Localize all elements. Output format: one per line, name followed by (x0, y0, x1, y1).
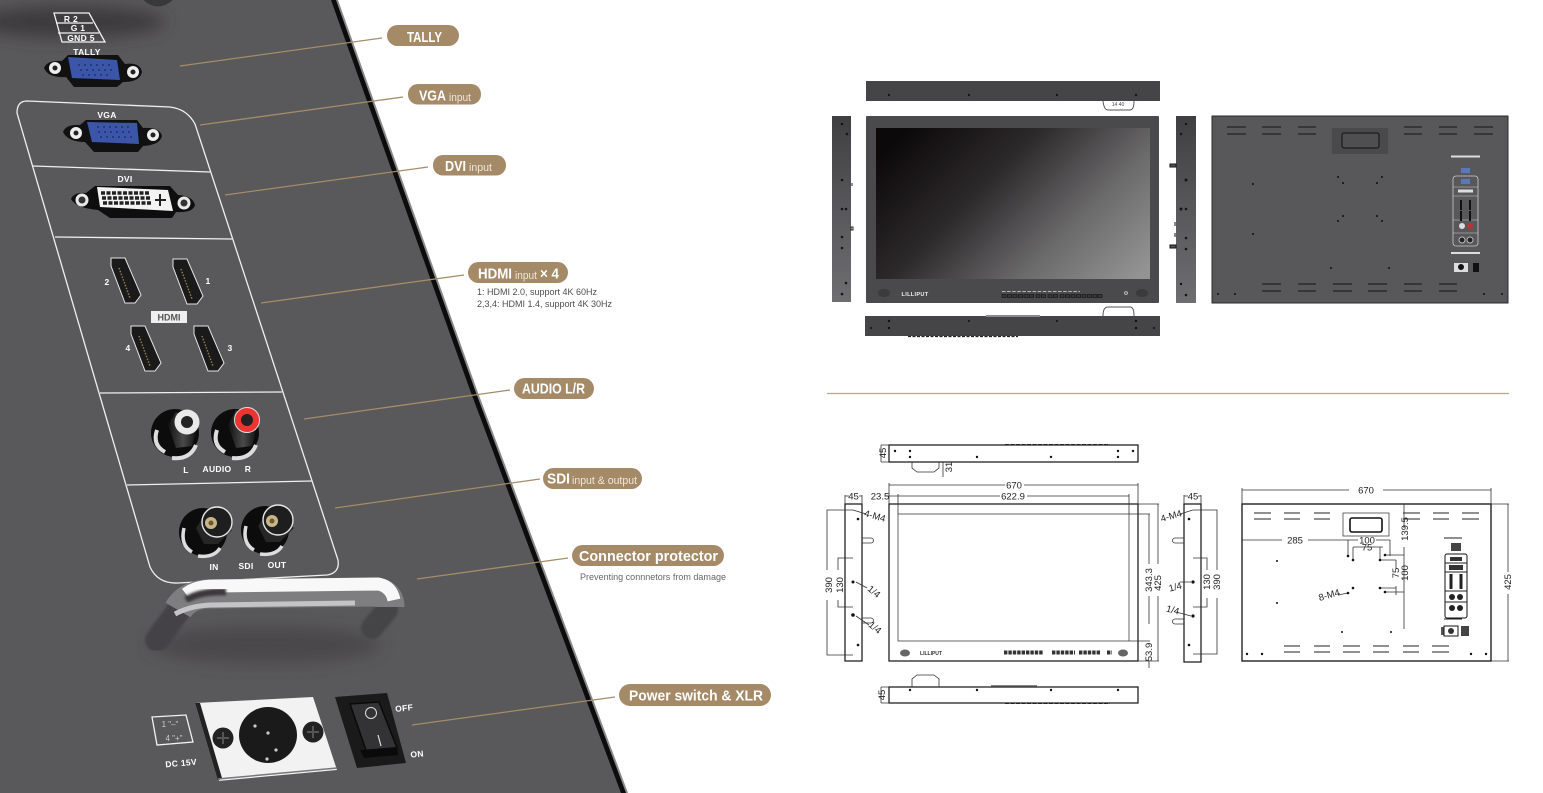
front dimension values: 343.3 (1144, 568, 1155, 592)
callout: sdi input and output: input & output (572, 475, 637, 487)
sdi in connector (179, 507, 232, 556)
callout: sdi input and output: SDI (547, 470, 570, 488)
drawing: front view (871, 480, 1164, 668)
callout: tally: TALLY (407, 29, 442, 46)
side dimension values: 390 (824, 577, 835, 593)
panel: product views (832, 81, 1508, 336)
sdi labels (209, 560, 287, 572)
callout: power switch and xlr (412, 684, 771, 725)
callout: power switch and xlr: Power switch & XLR (629, 688, 763, 704)
front buttons (1002, 292, 1127, 298)
off label: OFF (395, 702, 414, 714)
drawing: top view (878, 444, 1138, 477)
callout: audio l/r (304, 378, 594, 419)
drawing: bottom view: 45 (877, 690, 888, 700)
tally pin table: GND 5 (67, 33, 95, 43)
audio labels: AUDIO (203, 464, 232, 474)
drawing: right side view (1159, 492, 1223, 662)
rear dimension values: 285 (1287, 536, 1303, 546)
drawing: top view: 31 (944, 462, 955, 472)
rear dimension values: 100 (1400, 565, 1411, 581)
front dimension values: 670 (1006, 480, 1022, 492)
callout: vga input (200, 84, 481, 125)
hdmi port numbers: 4 (125, 343, 131, 353)
xlr pin note: 4 "+" (165, 734, 183, 743)
callout: tally (180, 25, 459, 66)
xlr pin note (152, 715, 193, 745)
audio labels: R (245, 464, 251, 474)
audio labels (183, 464, 251, 475)
callout: vga input: input (449, 92, 471, 104)
tally pin table (54, 13, 105, 43)
connector board outline (17, 101, 338, 583)
drawing: rear view (1242, 486, 1514, 661)
front buttons outline (1004, 650, 1112, 654)
drawing brand: LILLIPUT (920, 651, 942, 657)
xlr power connector (195, 697, 337, 781)
side dimension values: 45 (1188, 492, 1198, 502)
callout: hdmi input x4: HDMI (478, 266, 512, 282)
top view (866, 81, 1160, 110)
power rocker switch (335, 693, 406, 768)
audio labels: L (183, 465, 189, 475)
rear mounting holes (1217, 176, 1503, 295)
top handle fragment (146, 0, 170, 2)
sdi out connector (241, 505, 294, 554)
tally pin table: R 2 (64, 14, 78, 24)
brand: LILLIPUT (902, 292, 929, 298)
rear dimension lines (1242, 488, 1509, 661)
sdi labels: OUT (268, 560, 287, 570)
speaker grille (1136, 289, 1148, 297)
callout: connector protector: Connector protector (579, 548, 718, 565)
hdmi notes: 2,3,4: HDMI 1.4, support 4K 30Hz (477, 298, 612, 309)
right side view (1170, 116, 1196, 303)
dc 15v label: DC 15V (165, 757, 197, 769)
front dimension values: 425 (1153, 575, 1164, 591)
speaker outlines (1118, 650, 1128, 656)
callout: connector protector (417, 545, 726, 583)
side dimension values: 4-M4 (1159, 508, 1183, 525)
front dimension values (871, 480, 1164, 661)
hdmi port numbers (104, 276, 233, 353)
hdmi label: HDMI (158, 312, 180, 322)
callout: hdmi input x4 (261, 262, 612, 309)
xlr pin note: 1 "–" (162, 720, 179, 729)
panel: monitor rear close-up (0, 0, 628, 793)
rear dimension values: 100 (1359, 536, 1375, 546)
rear view (1212, 116, 1508, 303)
tally pin table: G 1 (71, 23, 85, 33)
callout: dvi input: DVI (445, 158, 466, 175)
hdmi port numbers: 3 (227, 343, 233, 353)
drawing connector board (1441, 538, 1469, 636)
front dimension values: 23.5 (871, 492, 889, 502)
callout: vga input: VGA (419, 88, 446, 104)
side dimension values: 4-M4 (863, 508, 887, 525)
rear dimension values: 139.5 (1400, 517, 1411, 541)
audio right jack (211, 408, 260, 458)
side dimension values (824, 492, 887, 637)
speaker grille (878, 289, 890, 297)
side dimension values: 45 (848, 492, 859, 502)
hdmi ports (111, 258, 224, 371)
on label: ON (410, 748, 424, 760)
side dimension values: 1/4 (865, 584, 882, 601)
hdmi label (151, 311, 187, 323)
screen (876, 128, 1150, 279)
side dimension values: 130 (1202, 574, 1213, 590)
callouts (180, 25, 771, 725)
rear dimension values: 75 (1391, 568, 1402, 578)
hdmi notes (477, 286, 612, 309)
hdmi port numbers: 2 (104, 277, 110, 287)
rear dimension values: 75 (1362, 542, 1372, 554)
rear vents (1227, 127, 1493, 291)
vga label: VGA (97, 110, 117, 120)
side dimension values: 1/4 (1168, 581, 1183, 595)
drawing handle recess (1343, 513, 1389, 536)
bottom view (865, 307, 1160, 336)
panel: dimension drawings (820, 444, 1514, 704)
rear dimension values: 8-M4 (1317, 587, 1341, 604)
board dividers (33, 166, 312, 485)
side dimension values (1159, 492, 1223, 618)
speaker outlines (900, 650, 910, 656)
drawing: top view: 45 (878, 448, 889, 458)
section divider (827, 392, 1509, 394)
rear dimension values: 425 (1503, 574, 1514, 590)
connector protector handle (150, 584, 394, 663)
sdi labels: IN (209, 562, 219, 572)
side dimension values: 1/4 (1165, 604, 1180, 618)
side dimension values: 390 (1212, 574, 1223, 590)
rear handle recess (1332, 128, 1388, 154)
rear dimension values: 670 (1358, 486, 1374, 496)
front dimension values: 53.9 (1144, 643, 1155, 661)
front dimension lines (885, 483, 1159, 668)
tally label: TALLY (73, 47, 101, 57)
rear dimension values (1287, 486, 1514, 604)
left side view (832, 116, 853, 302)
audio left jack (151, 409, 200, 458)
front view (866, 116, 1159, 303)
callout: hdmi input x4: × 4 (540, 266, 560, 282)
dvi connector (71, 186, 195, 218)
dvi label: DVI (117, 174, 133, 184)
side dimension values: 130 (835, 577, 846, 593)
side dimension values: 1/4 (866, 620, 883, 637)
callout: sdi input and output (335, 468, 642, 508)
drawing: left side view (820, 492, 887, 661)
hdmi notes: 1: HDMI 2.0, support 4K 60Hz (477, 286, 597, 297)
protector note: Preventing connnetors from damage (580, 572, 726, 583)
vga connector (63, 120, 162, 152)
drawing: bottom view (877, 675, 1138, 704)
callout: audio l/r: AUDIO L/R (522, 380, 585, 398)
drawing rear vents (1254, 513, 1479, 652)
front dimension values: 622.9 (1001, 492, 1025, 502)
sdi labels: SDI (238, 561, 254, 571)
top handle shadow (0, 6, 165, 38)
rear mini connector board (1451, 156, 1480, 272)
tally connector (44, 55, 142, 87)
callout: hdmi input x4: input (515, 270, 537, 282)
hdmi port numbers: 1 (205, 276, 211, 286)
top view: 14 40 (1112, 102, 1124, 108)
callout: dvi input: input (469, 162, 492, 174)
callout: dvi input (225, 155, 506, 195)
